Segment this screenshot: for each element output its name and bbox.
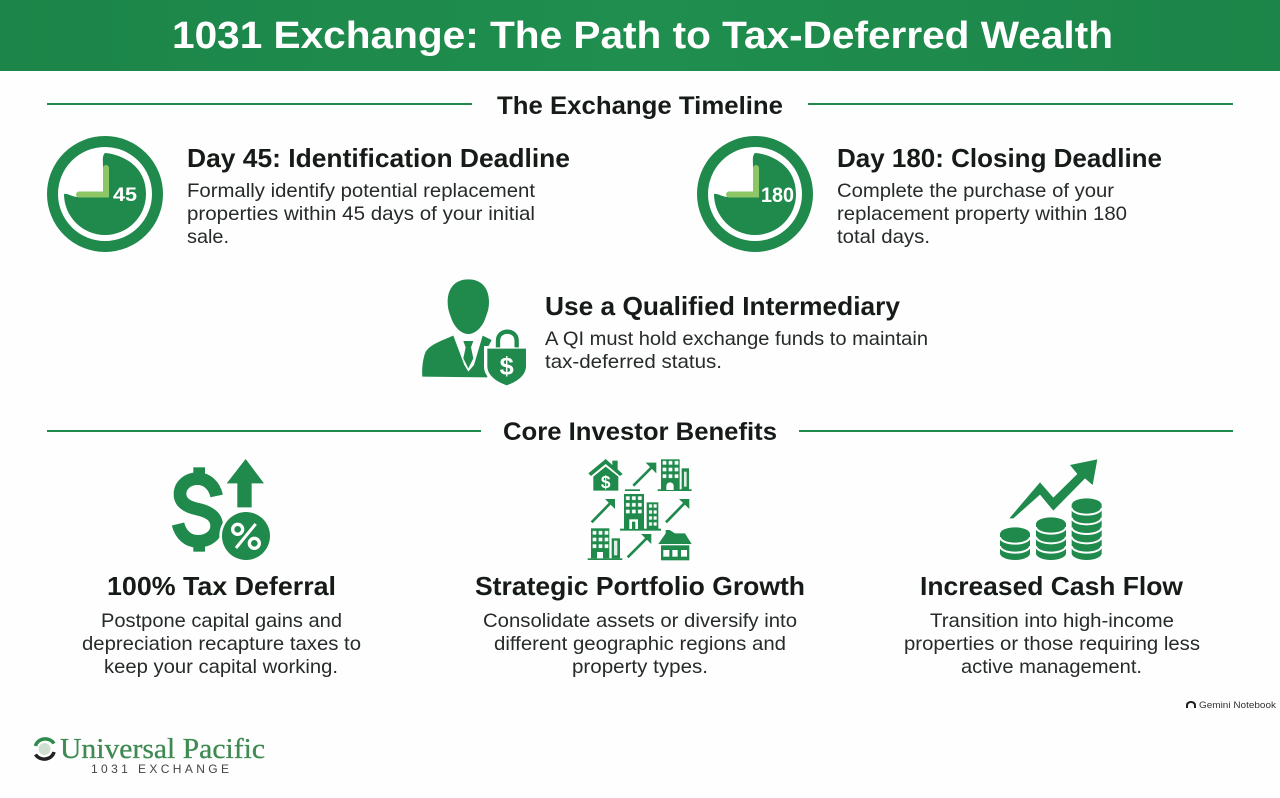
step: day 45: sale.: [187, 226, 229, 248]
benefit: cash flow: properties or those requiring less: [904, 633, 1200, 655]
benefit: cash flow: active management.: [961, 656, 1142, 678]
step: qualified intermediary: tax-deferred status.: [545, 351, 722, 373]
benefit: cash flow: [904, 571, 1200, 678]
benefit: portfolio growth: property types.: [572, 656, 708, 678]
section heading: timeline: The Exchange Timeline: [497, 92, 783, 120]
step: day 180: [837, 143, 1162, 248]
icon: qualified intermediary: $: [500, 353, 514, 381]
section heading: benefits: Core Investor Benefits: [503, 418, 777, 446]
step: day 45: properties within 45 days of your initial: [187, 203, 535, 225]
logo: universal pacific: Universal Pacific: [60, 733, 265, 765]
benefit: tax deferral: [82, 571, 361, 678]
step: day 180: Complete the purchase of your: [837, 180, 1115, 202]
benefit: tax deferral: 100% Tax Deferral: [107, 571, 336, 601]
icon: 180 day clock: 180: [761, 184, 794, 207]
benefit: portfolio growth: [475, 571, 805, 678]
step: qualified intermediary: A QI must hold exchange funds to maintain: [545, 328, 928, 350]
benefit: tax deferral: keep your capital working.: [104, 656, 338, 678]
icon: qualified intermediary: [422, 279, 529, 388]
step: qualified intermediary: [545, 291, 928, 373]
step: qualified intermediary: Use a Qualified Intermediary: [545, 291, 901, 321]
step: day 45: Formally identify potential replacement: [187, 180, 536, 202]
step: day 45: [187, 143, 570, 248]
icon: tax deferral: [178, 459, 273, 563]
benefit: portfolio growth: Strategic Portfolio Growth: [475, 571, 805, 601]
step: day 180: replacement property within 180: [837, 203, 1127, 225]
step: day 45: Day 45: Identification Deadline: [187, 143, 570, 173]
title banner: 1031 Exchange: The Path to Tax-Deferred Wealth: [172, 15, 1113, 57]
icon: cash flow: [1000, 459, 1102, 560]
logo: universal pacific: [36, 733, 265, 776]
benefit: portfolio growth: Consolidate assets or diversify into: [483, 610, 797, 632]
benefit: tax deferral: Postpone capital gains and: [101, 610, 342, 632]
step: day 180: Day 180: Closing Deadline: [837, 143, 1162, 173]
title banner: [0, 0, 1280, 71]
step: day 180: total days.: [837, 226, 930, 248]
icon: 180 day clock: [702, 142, 808, 246]
icon: 45 day clock: [52, 142, 158, 246]
logo: universal pacific: 1031 EXCHANGE: [91, 762, 229, 776]
icon: portfolio growth: $: [601, 472, 611, 492]
benefit: portfolio growth: different geographic regions and: [494, 633, 786, 655]
benefit: cash flow: Transition into high-income: [930, 610, 1174, 632]
icon: portfolio growth: [588, 459, 692, 560]
benefit: cash flow: Increased Cash Flow: [920, 571, 1184, 601]
icon: 45 day clock: 45: [113, 185, 137, 206]
benefit: tax deferral: depreciation recapture taxes to: [82, 633, 361, 655]
watermark: gemini notebook: Gemini Notebook: [1199, 700, 1276, 711]
